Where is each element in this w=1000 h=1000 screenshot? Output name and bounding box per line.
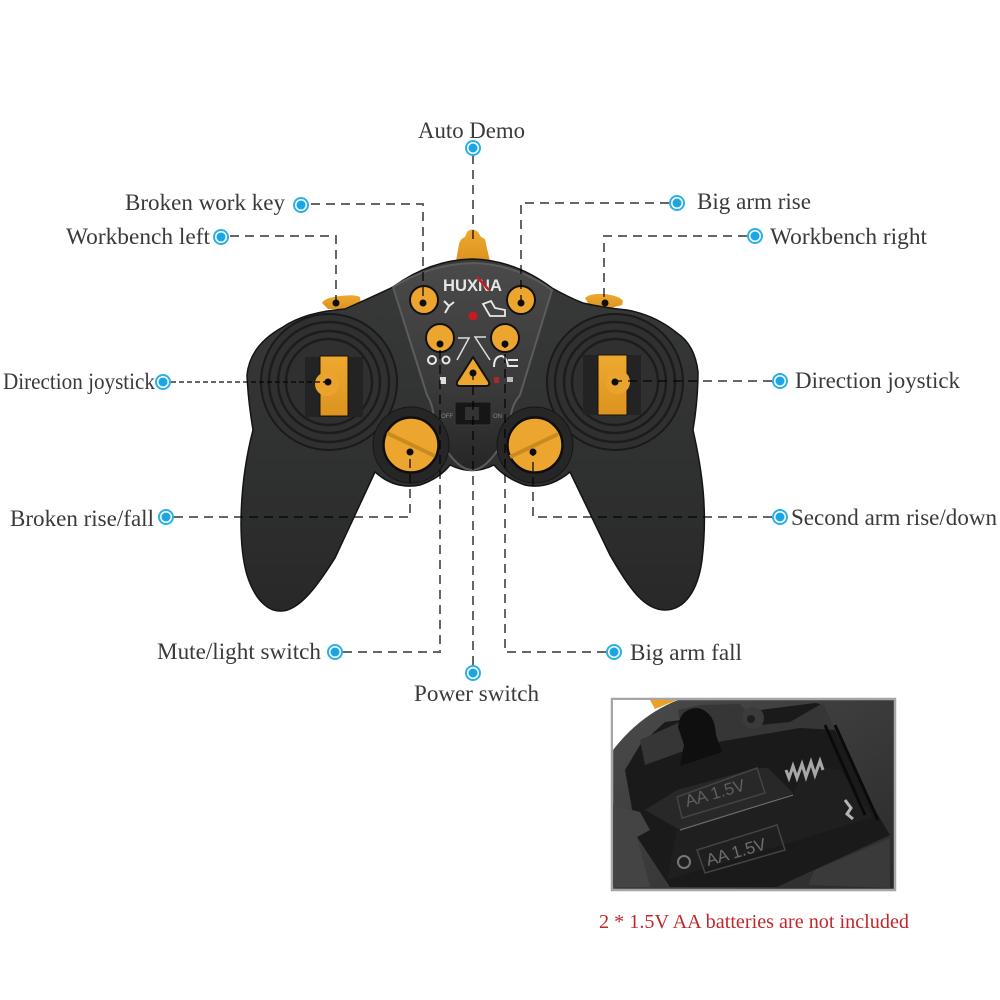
cyan markers [156, 141, 787, 680]
right joystick [547, 314, 683, 450]
right shoulder button [585, 294, 623, 309]
panel icons [428, 301, 518, 384]
callout labels: Workbench left [66, 224, 211, 249]
controller [241, 230, 704, 611]
controller body [241, 259, 704, 611]
callout labels [3, 118, 997, 706]
power switch: ON [493, 414, 502, 420]
power switch: OFF [441, 414, 453, 420]
callout labels: Direction joystick [3, 369, 155, 394]
left dial [373, 407, 449, 483]
callout labels: Big arm rise [697, 189, 811, 214]
left joystick [261, 314, 397, 450]
callout labels: Mute/light switch [157, 639, 321, 664]
right dial [497, 407, 573, 483]
battery compartment photo [612, 699, 895, 890]
callout labels: Auto Demo [418, 118, 525, 143]
callout labels: Direction joystick [795, 368, 960, 393]
battery label upper: AA 1.5V [683, 775, 748, 811]
leader lines [171, 155, 772, 665]
red indicator light [468, 312, 478, 320]
brand logo: HUXNA [443, 276, 502, 295]
left shoulder button [322, 295, 361, 309]
callout labels: Broken work key [125, 190, 285, 215]
top antenna knob [456, 230, 490, 261]
leader end points on controller [324, 300, 618, 456]
callout labels: Second arm rise/down [791, 505, 997, 530]
panel buttons [410, 286, 535, 386]
callout labels: Broken rise/fall [10, 506, 154, 531]
centre panel [393, 263, 552, 470]
callout labels: Workbench right [770, 224, 928, 249]
battery label lower: AA 1.5V [704, 834, 769, 870]
callout labels: Power switch [414, 681, 539, 706]
callout labels: Big arm fall [630, 640, 742, 665]
power switch [441, 402, 502, 425]
battery note: 2 * 1.5V AA batteries are not included [599, 911, 909, 933]
